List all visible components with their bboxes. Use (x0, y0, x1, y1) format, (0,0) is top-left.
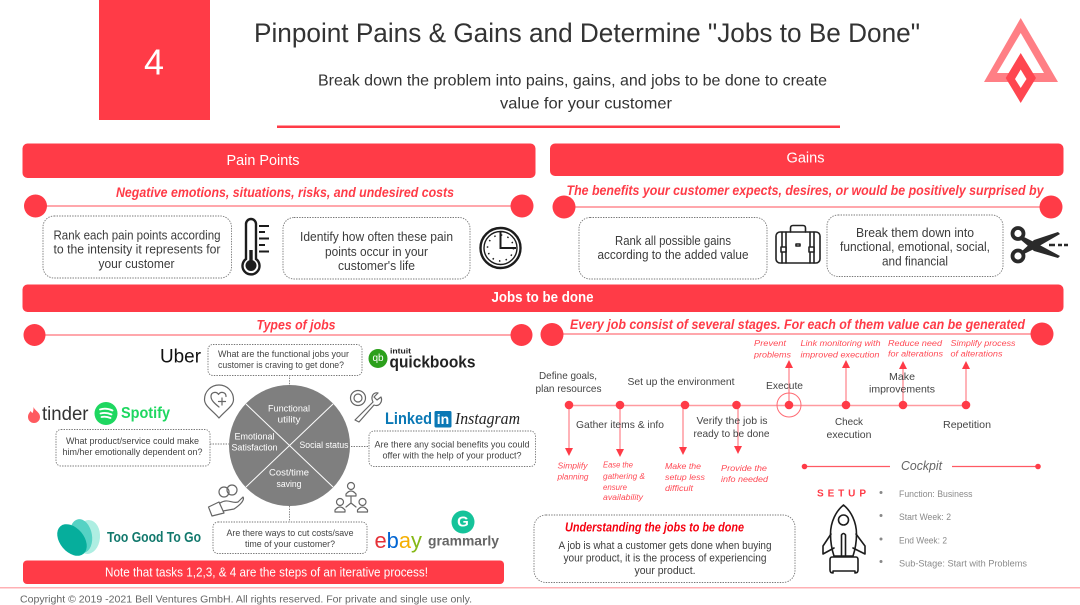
stage labels: plan resources (536, 383, 602, 395)
subheading: pain points: Negative emotions, situations, risks, and undesired costs (116, 184, 454, 200)
stage labels: Verify the job is (696, 415, 768, 427)
heading: pain points (22, 144, 536, 178)
callout: social: Are there any social benefits you could (374, 440, 530, 450)
pie: job types: Social status (300, 440, 349, 451)
value labels: above: Reduce need (888, 338, 942, 348)
text block: how often (283, 218, 470, 279)
stage labels: execution (826, 429, 872, 441)
text block: break down: functional, emotional, social, (840, 240, 990, 254)
icon: thermometer (242, 219, 269, 274)
callout: understanding the jobs: Understanding the jobs to be done (565, 520, 744, 534)
panel: pain points (22, 144, 536, 279)
value labels: above (753, 338, 1016, 360)
cockpit details (880, 489, 1028, 568)
text block: how often: points occur in your (325, 245, 428, 259)
value labels: above: Link monitoring with (800, 338, 881, 348)
pie: job types: Functional (268, 404, 310, 414)
stage labels: Execute (766, 380, 803, 392)
value labels: below: Make the (665, 461, 701, 471)
stage labels: Make (889, 371, 915, 383)
stage labels: Check (835, 416, 864, 428)
cockpit details: Function: Business (899, 489, 973, 499)
value labels: below: Simplify (558, 460, 588, 470)
value labels: above: of alterations (950, 348, 1003, 358)
icon: briefcase (776, 226, 820, 263)
logo: Grammarly (428, 510, 499, 548)
stage labels: Define goals, (539, 370, 597, 382)
callout: cost: time of your customer? (245, 539, 335, 550)
text block: how often: Identify how often these pain (300, 230, 453, 244)
value labels: above: Prevent (754, 338, 787, 348)
panel: cockpit (802, 459, 1041, 573)
logo (984, 18, 1058, 103)
logo: eBay: ebay (374, 528, 422, 552)
logo: Uber: Uber (160, 346, 202, 368)
icon: scissors (1012, 228, 1068, 262)
callout: functional jobs (208, 344, 362, 376)
text block: rank pain points: Rank each pain points according (54, 228, 221, 242)
pie: job types (229, 385, 350, 506)
pie: job types: Emotional (234, 432, 274, 442)
text block: rank pain points: your customer (98, 257, 174, 271)
icon: clock (480, 228, 520, 268)
text block: rank gains: Rank all possible gains (615, 234, 731, 248)
value labels: below: planning (557, 472, 589, 482)
stage labels (536, 370, 991, 441)
logo: QuickBooks: intuit (390, 348, 412, 356)
subtitle: Break down the problem into pains, gains, and jobs to be done to create (318, 72, 827, 90)
heading: pain points: Pain Points (226, 152, 300, 169)
value labels: above: problems (753, 350, 792, 360)
callout: emotional: him/her emotionally dependent on? (62, 447, 202, 458)
logo: Spotify (94, 402, 170, 425)
panel: job stages (534, 316, 1054, 582)
chart: stage timeline (565, 360, 970, 457)
value labels: below: info needed (721, 474, 768, 484)
icon: rocket (823, 505, 865, 573)
cockpit heading: Cockpit (901, 459, 943, 473)
value labels: below: Ease the (603, 460, 633, 470)
logo: Tinder: tinder (42, 404, 89, 425)
callout: understanding the jobs: your product, it is the process of experiencing (564, 552, 766, 564)
value labels: below: difficult (665, 483, 694, 493)
value labels: above: for alterations (888, 348, 944, 358)
callout: understanding the jobs: your product. (634, 565, 696, 577)
stage labels: improvements (869, 384, 935, 396)
subheading: types of jobs (24, 318, 532, 346)
text block: how often: customer's life (338, 259, 415, 273)
step number block: 4 (144, 42, 164, 82)
pie: job types: Satisfaction (232, 442, 278, 454)
value labels: below: setup less (665, 472, 706, 482)
step number block (99, 0, 210, 120)
pie: job types: saving (276, 479, 302, 490)
note banner: Note that tasks 1,2,3, & 4 are the steps of an iterative process! (105, 566, 428, 580)
cockpit details: Start Week: 2 (899, 512, 951, 522)
callout: functional jobs: What are the functional jobs your (218, 349, 349, 360)
subtitle: value for your customer (500, 96, 673, 112)
callout: understanding the jobs: A job is what a customer gets done when buying (558, 540, 772, 552)
icon: wrench (350, 390, 382, 422)
callout: social (369, 431, 536, 466)
heading: jobs to be done: Jobs to be done (492, 290, 594, 306)
value labels: below (557, 460, 768, 502)
heading: jobs to be done (22, 284, 1064, 312)
text block: rank gains: according to the added value (598, 248, 749, 262)
subheading: job stages (540, 316, 1054, 346)
text block: rank pain points: to the intensity it represents for (54, 242, 220, 256)
stage labels: ready to be done (694, 428, 770, 440)
callout: social: offer with the help of your product? (382, 450, 522, 462)
value labels: below: gathering & (603, 471, 645, 481)
value labels: above: improved execution (800, 350, 880, 360)
stage labels: Set up the environment (628, 376, 735, 388)
callout: emotional (56, 430, 210, 466)
text block: break down: Break them down into (856, 226, 974, 240)
logo: LinkedIn: Linked (385, 410, 432, 428)
text block: break down: and financial (882, 254, 948, 268)
note banner (23, 560, 504, 584)
setup label: SETUP (817, 488, 866, 500)
logo: Too Good To Go (51, 517, 201, 562)
text block: rank pain points (43, 216, 232, 278)
text block: rank gains (579, 218, 767, 279)
callout: cost (213, 522, 367, 554)
subheading: gains (552, 182, 1062, 218)
logo: Spotify: Spotify (121, 405, 170, 422)
heading: gains: Gains (786, 150, 824, 166)
value labels: below: ensure (603, 482, 627, 492)
stage labels: Repetition (943, 419, 991, 431)
stage labels: Gather items & info (576, 419, 664, 431)
panel: types of jobs (23, 318, 536, 584)
icon: hand with coins (208, 485, 243, 516)
logo: Instagram: Instagram (454, 409, 520, 428)
callout: cost: Are there ways to cut costs/save (226, 528, 354, 539)
heading: gains (550, 144, 1064, 176)
subtitle (318, 72, 827, 112)
logo: QuickBooks: quickbooks (390, 352, 476, 372)
subheading: job stages: Every job consist of several stages. For each of them value can be generated (570, 316, 1025, 332)
logo: QuickBooks (368, 348, 476, 372)
pie: job types: utility (278, 414, 301, 426)
value labels: above: Simplify process (950, 338, 1016, 348)
panel: gains (550, 144, 1068, 279)
logo: LinkedIn: in (437, 411, 449, 427)
logo: Grammarly: G (457, 514, 469, 530)
value labels: below: Provide the (721, 463, 767, 473)
pie: job types: Cost/time (269, 468, 309, 478)
cockpit details: Sub-Stage: Start with Problems (899, 558, 1028, 568)
cockpit details: End Week: 2 (899, 536, 947, 546)
subheading: pain points (24, 184, 534, 218)
icon: heart pin (204, 385, 234, 418)
callout: emotional: What product/service could make (66, 436, 199, 447)
callout: functional jobs: customer is craving to get done? (218, 360, 344, 371)
cockpit heading (802, 459, 1041, 473)
value labels: below: availability (603, 492, 644, 502)
callout: understanding the jobs (534, 515, 795, 582)
text block: break down (827, 215, 1003, 276)
subheading: types of jobs: Types of jobs (256, 318, 336, 332)
logo: Too Good To Go: Too Good To Go (107, 530, 201, 546)
icon: people network (335, 482, 368, 512)
logo: Grammarly: grammarly (428, 534, 499, 548)
title: Pinpoint Pains & Gains and Determine "Jobs to Be Done" (254, 18, 920, 48)
logo: QuickBooks: qb (372, 353, 384, 364)
